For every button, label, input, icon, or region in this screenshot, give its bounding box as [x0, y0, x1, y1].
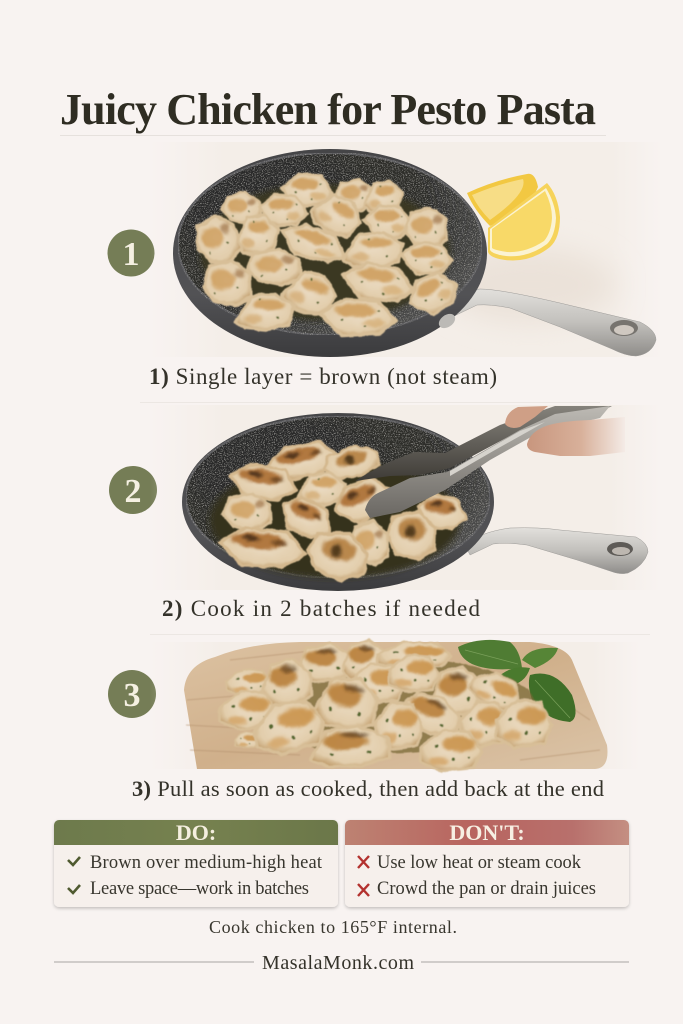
chicken pieces: [218, 437, 469, 584]
chicken pieces: [220, 640, 552, 771]
surface: [150, 142, 662, 357]
pan handle: [450, 289, 656, 356]
basil leaves: [458, 640, 576, 722]
photo: pan with single layer of chicken and lemon: [150, 142, 662, 357]
pan interior: [178, 153, 482, 335]
pan body: [182, 413, 494, 591]
photo: pan with chicken and tongs: [140, 402, 660, 591]
do header: DO:: [176, 820, 216, 845]
step 3 number badge: [108, 670, 156, 718]
step 1 caption: 1) Single layer = brown (not steam): [149, 364, 497, 389]
do header: [54, 820, 338, 845]
surface: [150, 642, 640, 769]
don't item 2: Crowd the pan or drain juices: [377, 879, 596, 899]
don't header: DON'T:: [449, 820, 525, 845]
food safety note: Cook chicken to 165°F internal.: [209, 917, 457, 937]
title: Juicy Chicken for Pesto Pasta: [60, 85, 596, 134]
lemon wedges: [467, 174, 560, 260]
step 2 caption: 2) Cook in 2 batches if needed: [162, 596, 480, 621]
step 3 number badge: 3: [124, 677, 140, 714]
pan interior: [186, 416, 490, 578]
chicken pieces: [191, 174, 464, 335]
surface: [150, 405, 660, 590]
step 1 number badge: [108, 230, 154, 276]
tongs: [355, 406, 612, 518]
step 2 number badge: 2: [124, 473, 142, 510]
step 2 number badge: [109, 466, 157, 514]
step 3 caption: 3) Pull as soon as cooked, then add back at the end: [132, 776, 604, 801]
don't item 1: Use low heat or steam cook: [377, 853, 582, 873]
don't header: [345, 820, 629, 845]
panel: don't: [345, 820, 629, 907]
pan handle: [465, 528, 648, 574]
panel: do: [54, 820, 338, 907]
do item 1: Brown over medium-high heat: [90, 853, 323, 873]
wooden board: [184, 642, 608, 769]
handle rivet: [436, 311, 458, 331]
footer with site name: MasalaMonk.com: [262, 952, 414, 974]
do item 2: Leave space—work in batches: [90, 879, 309, 899]
hand: [505, 406, 625, 456]
pan body: [173, 149, 487, 357]
photo: chicken on wooden board with basil: [150, 634, 650, 771]
step 1 number badge: 1: [122, 236, 140, 273]
